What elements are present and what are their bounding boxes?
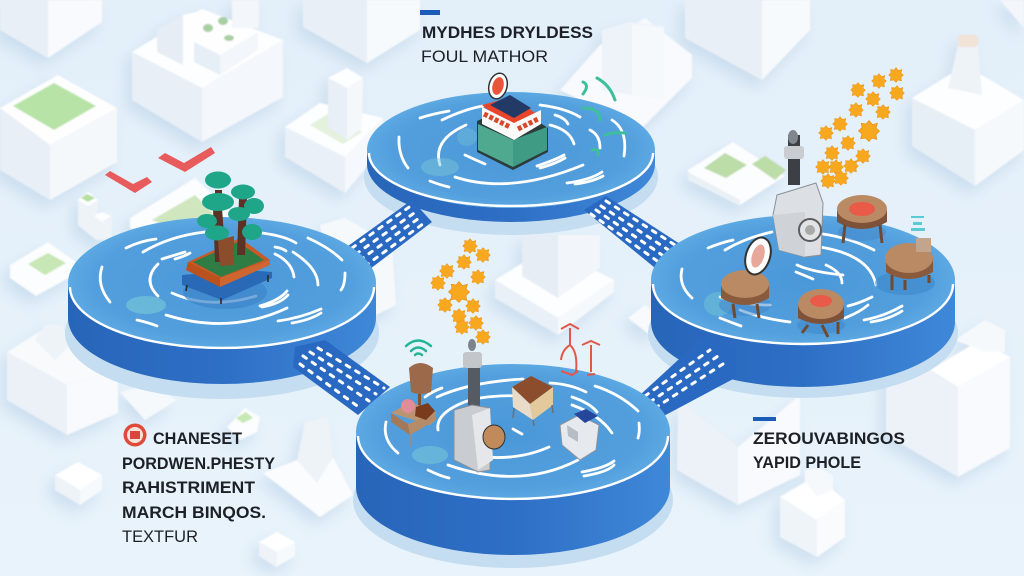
icon: lamp cart <box>391 363 436 446</box>
platform: right <box>648 68 958 398</box>
block: pad behind bottom-left <box>120 385 177 420</box>
text block: lower left: CHANESET <box>153 430 242 448</box>
water rings <box>681 232 902 326</box>
icon: round plate <box>741 234 775 278</box>
block: small pad right <box>628 305 665 335</box>
block: green pad <box>130 178 240 240</box>
block: lower right left <box>677 395 800 505</box>
block: left green pad <box>10 242 76 296</box>
block: behind left bridge <box>320 218 396 318</box>
bridge: top-left <box>348 200 432 272</box>
text block: lower left: PORDWEN.PHESTY <box>122 455 275 473</box>
text block: lower left: MARCH BINQOS. <box>122 504 266 522</box>
cube: small left <box>55 462 102 505</box>
icon: table left <box>719 270 771 318</box>
block: small green pad <box>227 408 260 440</box>
platform: top <box>364 71 658 235</box>
icon: machine <box>773 130 823 257</box>
block: tower on plinth <box>285 68 383 193</box>
icon: table top <box>837 195 887 243</box>
cube: small bottom <box>259 532 295 567</box>
water rings <box>100 232 345 326</box>
block: lower left <box>7 325 118 435</box>
icon: tree canopy <box>197 172 264 240</box>
icon: brown cube cart <box>512 376 553 426</box>
heading: right: ZEROUVABINGOS <box>753 429 905 448</box>
icon: orange sparks <box>430 238 490 344</box>
heading: right: YAPID PHOLE <box>753 453 861 472</box>
heading: top: MYDHES DRYLDESS <box>422 23 593 42</box>
block: top-centre <box>303 0 420 63</box>
icon: blue machine <box>560 409 599 460</box>
icon: table front <box>797 289 845 337</box>
block: lower tower plinth <box>263 417 353 517</box>
platform: left <box>65 172 379 399</box>
block: factory <box>132 0 283 142</box>
block: small cube <box>78 192 112 240</box>
icon: orange sparks <box>816 68 904 188</box>
icon: tree trunks <box>213 190 247 262</box>
block: right building <box>912 35 1024 186</box>
bridge: top-right <box>584 196 680 272</box>
text block: lower left <box>122 424 275 546</box>
icon: wifi symbol <box>406 340 431 355</box>
block: top-left <box>0 0 102 58</box>
text block: lower left: TEXTFUR <box>122 528 198 546</box>
block: lower right large <box>886 320 1010 477</box>
icon: red arrows <box>561 324 600 375</box>
heading: right <box>753 417 905 472</box>
red marker L 1 <box>105 171 152 193</box>
icon: table right <box>875 216 935 295</box>
block: checker pad <box>688 142 786 206</box>
block: centre plinth <box>495 235 614 335</box>
platform: bottom <box>353 238 673 568</box>
icon: bonsai planter <box>182 172 272 309</box>
block: top-right building <box>685 0 810 80</box>
heading: top: FOUL MATHOR <box>421 47 548 66</box>
water rings <box>399 105 625 187</box>
heading: top <box>420 10 593 66</box>
icon: red seal <box>124 424 146 446</box>
icon: teal swirls <box>583 78 625 155</box>
block: lower right small tower <box>780 468 845 557</box>
red marker L 2 <box>158 147 215 172</box>
bridge: lower-right <box>640 337 735 418</box>
block: behind top platform right <box>560 18 692 130</box>
bridge: lower-left <box>293 340 390 415</box>
block: top-right corner <box>1000 0 1024 28</box>
text block: lower left: RAHISTRIMENT <box>122 479 255 497</box>
icon: shop building <box>477 71 548 170</box>
water rings <box>385 379 639 478</box>
icon: round sign <box>486 71 510 101</box>
block: green roof <box>0 75 117 200</box>
icon: machine tower <box>454 339 505 472</box>
